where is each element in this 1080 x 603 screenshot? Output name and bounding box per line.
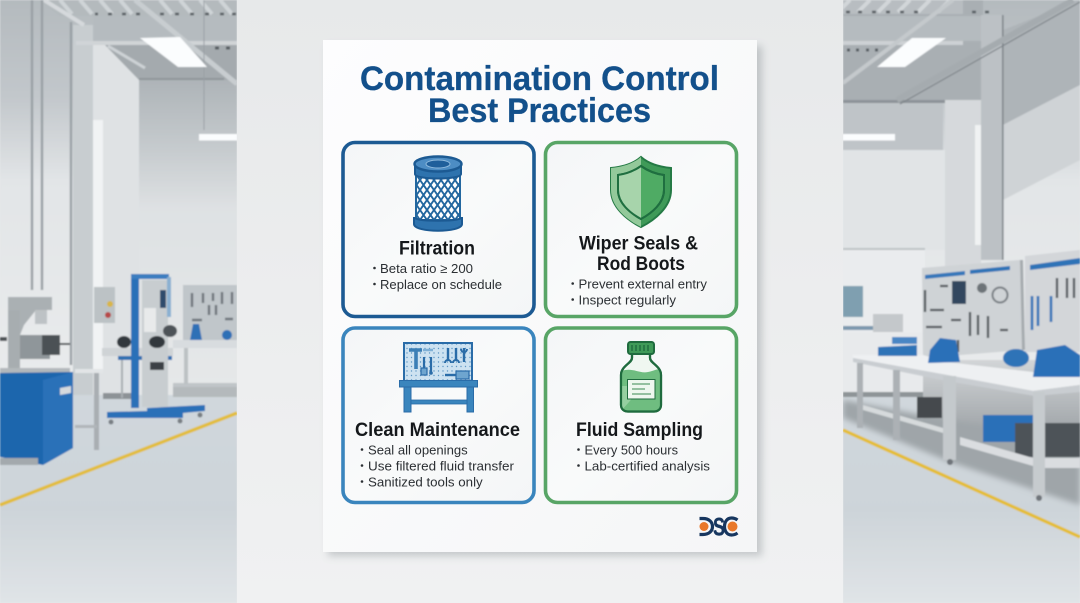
icon: sample bottle [621,342,661,412]
bullet list: Use filtered fluid transfer [368,458,515,474]
bullet list: Seal all openings [368,442,468,458]
poster [323,40,762,556]
bullet list: Every 500 hours [584,442,678,458]
bullet list [571,276,707,308]
icon: tool bench [400,343,478,412]
panel: filtration [343,142,534,316]
heading: Fluid Sampling [576,420,703,441]
heading [579,234,698,275]
panel: clean maintenance [343,328,534,502]
logo: DSC [700,514,738,542]
bullet list [361,442,515,490]
poster sheet [323,40,757,552]
icon: shield [611,157,671,227]
bullet list [577,442,711,474]
title: Contamination Control [360,60,719,98]
title [360,60,719,130]
title: Best Practices [428,92,651,130]
logo: DSC: S [713,514,725,542]
bullet list: Prevent external entry [578,276,707,292]
bullet list: Replace on schedule [380,277,502,292]
panel: fluid sampling [546,328,736,502]
bullet list: Beta ratio ≥ 200 [380,261,473,276]
panel: wiper seals [546,142,736,316]
heading: Wiper Seals & [579,234,698,254]
bullet list: Lab-certified analysis [584,458,711,474]
heading: Rod Boots [597,254,685,275]
right workshop background [838,0,1080,603]
poster shadow [328,46,762,556]
heading: Filtration [399,238,475,260]
bullet list [373,261,502,292]
bullet list: Sanitized tools only [368,474,483,490]
bullet list: Inspect regularly [578,292,677,308]
heading: Clean Maintenance [355,420,520,441]
icon: filter cartridge [414,156,462,231]
central wall panel [237,0,843,603]
left workshop background [0,0,237,603]
